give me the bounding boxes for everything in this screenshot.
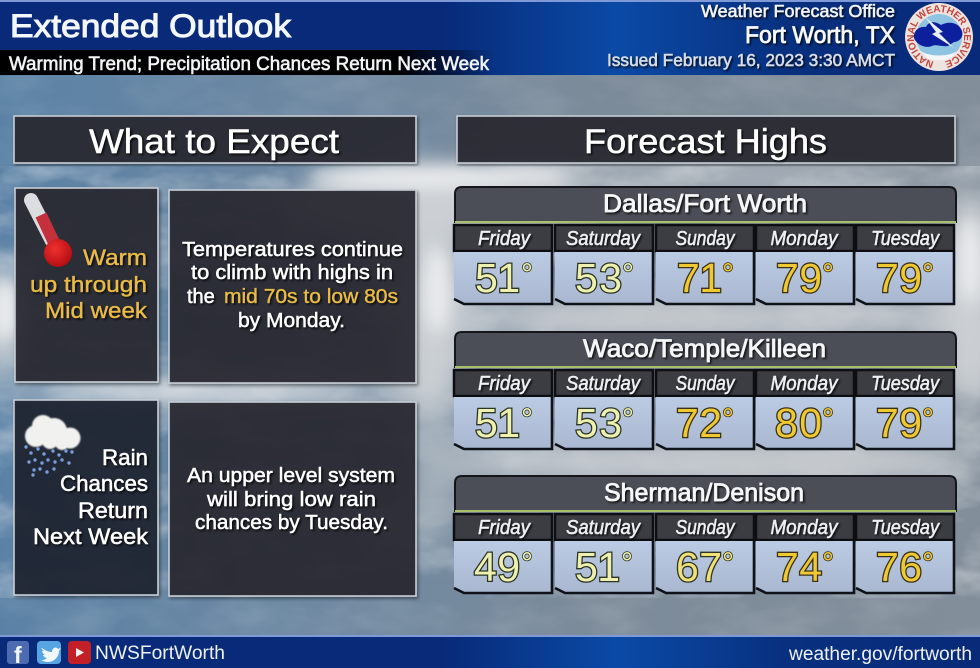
- day: Friday 51: °: [521, 403, 533, 436]
- day: Saturday 53: °: [622, 403, 634, 436]
- panel: rain label: Next Week: [33, 524, 149, 549]
- day: Saturday 51: [555, 514, 653, 593]
- day: Sunday 67: 67: [676, 544, 722, 590]
- icon: Facebook: f: [14, 642, 22, 668]
- day: Saturday 51: Saturday: [566, 517, 641, 539]
- footer banner: [0, 635, 980, 668]
- day: Friday 51: 51: [475, 400, 520, 446]
- icon: NWS logo: NATIONAL WEATHER SERVICE: [907, 5, 971, 68]
- title: Extended Outlook: [10, 8, 292, 44]
- panel: Waco/Temple/Killeen forecast: Waco/Temple/Killeen: [583, 335, 826, 363]
- heading: What to Expect: What to Expect: [89, 123, 340, 161]
- day: Monday 80: Monday: [770, 373, 838, 395]
- panel: rain description: chances by Tuesday.: [195, 512, 388, 534]
- day: Sunday 72: [656, 370, 754, 449]
- day: Monday 79: [756, 225, 854, 304]
- panel: rain label: Chances: [60, 471, 148, 496]
- day: Monday 74: 74: [776, 544, 822, 590]
- day: Monday 80: 80: [775, 400, 822, 446]
- day: Tuesday 79: [856, 225, 954, 304]
- day: Friday 51: [454, 370, 552, 449]
- day: Tuesday 76: [856, 514, 954, 593]
- day: Sunday 71: °: [722, 258, 734, 291]
- day: Saturday 51: 51: [575, 544, 620, 590]
- day: Monday 74: °: [822, 547, 834, 580]
- panel: warm up label: Warm: [83, 245, 147, 270]
- day: Friday 49: 49: [474, 544, 520, 590]
- panel: warm up label: Mid week: [45, 298, 148, 323]
- panel: Dallas/Fort Worth forecast: [454, 187, 956, 304]
- day: Monday 79: °: [822, 258, 834, 291]
- icon: thermometer: [31, 200, 72, 267]
- day: Friday 51: °: [521, 258, 533, 291]
- panel: Sherman/Denison forecast: [454, 476, 956, 593]
- header banner: [0, 0, 980, 75]
- office information: Fort Worth, TX: [745, 22, 895, 49]
- panel: temperature description: Temperatures continue: [182, 239, 403, 261]
- icon: rain cloud: [24, 415, 80, 477]
- day: Saturday 53: °: [622, 258, 634, 291]
- day: Tuesday 79: [856, 370, 954, 449]
- day: Friday 51: Friday: [478, 373, 531, 395]
- heading: Forecast Highs: Forecast Highs: [584, 123, 827, 161]
- day: Sunday 72: °: [722, 403, 734, 436]
- day: Friday 49: [454, 514, 552, 593]
- panel: warm up label: up through: [30, 272, 147, 297]
- day: Friday 51: [454, 225, 552, 304]
- day: Friday 51: Friday: [478, 228, 531, 250]
- day: Friday 51: 51: [475, 255, 520, 301]
- day: Tuesday 76: 76: [876, 544, 922, 590]
- panel: rain label: Rain: [102, 445, 148, 470]
- day: Monday 79: Monday: [770, 228, 838, 250]
- panel: temperature description: mid 70s to low 80s: [224, 286, 398, 308]
- panel: Dallas/Fort Worth forecast: Dallas/Fort Worth: [603, 190, 807, 218]
- panel: temperature description: [169, 190, 416, 383]
- panel: warm up label: [15, 188, 158, 382]
- day: Monday 80: °: [822, 403, 834, 436]
- panel: temperature description: to climb with highs in: [191, 262, 393, 284]
- heading: Forecast Highs: [457, 116, 955, 163]
- panel: temperature description: the: [187, 286, 215, 308]
- day: Tuesday 79: 79: [876, 255, 922, 301]
- day: Saturday 53: [555, 225, 653, 304]
- day: Sunday 71: Sunday: [676, 228, 735, 250]
- day: Friday 49: Friday: [478, 517, 531, 539]
- day: Saturday 53: Saturday: [566, 373, 641, 395]
- day: Saturday 53: [555, 370, 653, 449]
- panel: rain description: will bring low rain: [206, 489, 376, 511]
- day: Tuesday 79: Tuesday: [871, 373, 940, 395]
- day: Saturday 53: 53: [575, 255, 622, 301]
- day: Sunday 71: [656, 225, 754, 304]
- icon: Twitter: [37, 641, 61, 664]
- panel: Sherman/Denison forecast: Sherman/Denison: [604, 479, 804, 507]
- day: Sunday 67: Sunday: [676, 517, 735, 539]
- office information: Weather Forecast Office: [701, 1, 895, 21]
- panel: Waco/Temple/Killeen forecast: [454, 332, 956, 449]
- website: weather.gov/fortworth: [788, 644, 972, 665]
- panel: rain description: An upper level system: [187, 465, 395, 487]
- day: Monday 74: Monday: [770, 517, 838, 539]
- panel: temperature description: by Monday.: [238, 310, 345, 332]
- subtitle: Warming Trend; Precipitation Chances Return Next Week: [9, 53, 489, 75]
- icon: YouTube: [68, 641, 91, 664]
- day: Saturday 53: 53: [575, 400, 622, 446]
- social handle: NWSFortWorth: [95, 643, 225, 664]
- panel: rain label: Return: [78, 498, 148, 523]
- office information: [607, 1, 895, 70]
- day: Friday 49: °: [521, 547, 533, 580]
- day: Sunday 71: 71: [677, 255, 722, 301]
- day: Sunday 67: [656, 514, 754, 593]
- day: Tuesday 76: °: [922, 547, 934, 580]
- heading: What to Expect: [14, 116, 416, 163]
- day: Tuesday 79: 79: [876, 400, 922, 446]
- day: Saturday 51: °: [621, 547, 633, 580]
- day: Sunday 72: 72: [676, 400, 722, 446]
- day: Tuesday 79: °: [922, 258, 934, 291]
- day: Monday 79: 79: [776, 255, 822, 301]
- panel: rain label: [14, 400, 158, 595]
- day: Monday 80: [756, 370, 854, 449]
- day: Sunday 67: °: [722, 547, 734, 580]
- day: Saturday 53: Saturday: [566, 228, 641, 250]
- day: Tuesday 79: °: [922, 403, 934, 436]
- day: Tuesday 76: Tuesday: [871, 517, 940, 539]
- icon: Facebook: [7, 641, 29, 668]
- day: Tuesday 79: Tuesday: [871, 228, 940, 250]
- day: Monday 74: [756, 514, 854, 593]
- day: Sunday 72: Sunday: [676, 373, 735, 395]
- subtitle bar: [0, 50, 495, 75]
- panel: rain description: [169, 402, 416, 596]
- office information: Issued February 16, 2023 3:30 AMCT: [607, 50, 895, 70]
